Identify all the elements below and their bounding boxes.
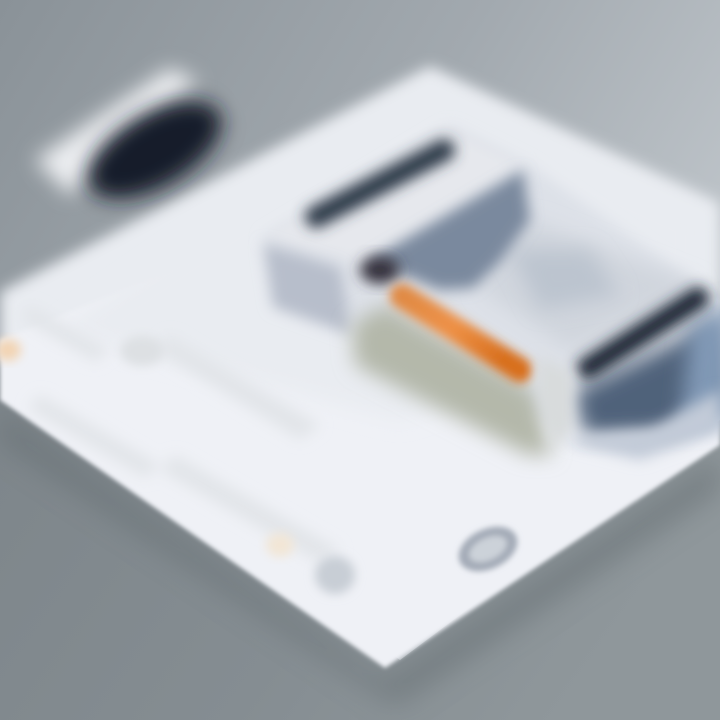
object: small device top left [35, 68, 237, 218]
left front face [263, 243, 352, 335]
right block underside: blue shade [560, 300, 720, 460]
top block face [262, 128, 525, 262]
icon: oval pill bottom [451, 518, 525, 580]
lower front base [352, 305, 552, 455]
orange marker bottom [266, 533, 294, 557]
device: main box [262, 125, 720, 460]
right block dark slot [588, 298, 698, 368]
icon: circle bottom [315, 556, 355, 594]
tray floor [480, 220, 700, 350]
orange marker left [0, 339, 21, 361]
tray markings [510, 250, 620, 310]
orange bar [402, 296, 520, 370]
dark gap [360, 256, 400, 284]
document text rows [20, 305, 340, 563]
dark slot on top [316, 150, 444, 217]
paper shadow [0, 410, 720, 705]
icon: circle left [120, 336, 164, 366]
inner shaded wall [367, 170, 530, 290]
light device base [262, 125, 720, 430]
right block light corner [538, 356, 572, 450]
